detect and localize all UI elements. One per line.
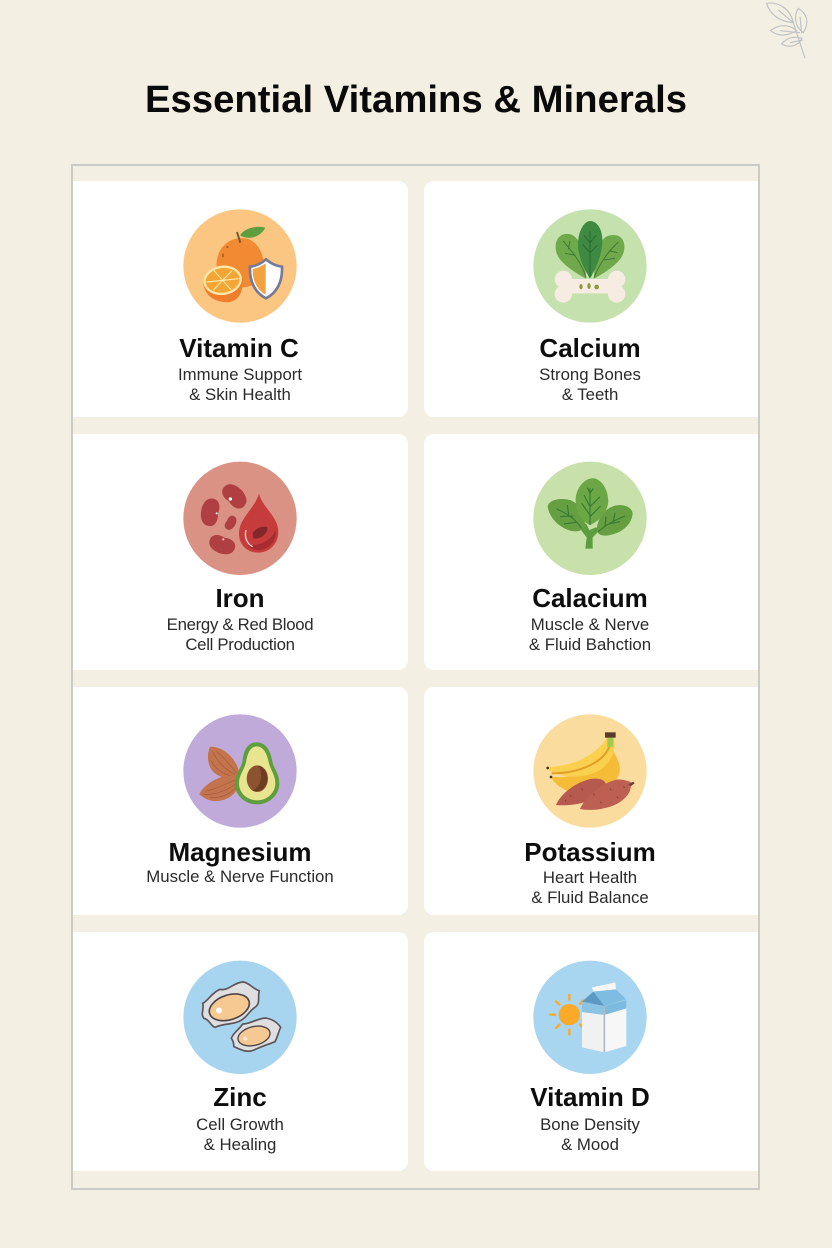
icon: spinach <box>533 462 647 575</box>
description <box>540 1115 640 1154</box>
description <box>539 365 641 404</box>
icon: beans and blood drop <box>183 462 297 575</box>
panel: Vitamin D <box>424 932 759 1171</box>
description: Muscle & Nerve <box>531 615 649 634</box>
description <box>178 365 302 404</box>
panel: Magnesium <box>72 687 408 915</box>
description: & Mood <box>561 1135 619 1154</box>
panel: Potassium <box>424 687 759 915</box>
icon: oysters <box>183 960 297 1074</box>
heading: Vitamin C <box>179 333 299 363</box>
description: & Fluid Bahction <box>529 635 651 654</box>
icon: greens and bone <box>533 209 647 323</box>
heading: Potassium <box>524 837 656 867</box>
description: Muscle & Nerve Function <box>146 867 334 886</box>
icon: bananas and sweet potatoes <box>533 714 647 828</box>
description: & Teeth <box>562 385 618 404</box>
description: Energy & Red Blood <box>167 615 313 634</box>
description <box>529 615 651 654</box>
panel: Zinc <box>72 932 408 1171</box>
description: Cell Production <box>185 635 295 654</box>
heading: Calacium <box>532 583 648 613</box>
icon: sun and milk carton <box>533 960 647 1074</box>
description: & Skin Health <box>189 385 291 404</box>
description: Bone Density <box>540 1115 640 1134</box>
description: Immune Support <box>178 365 302 384</box>
description: Heart Health <box>543 868 637 887</box>
panel: Vitamin C <box>72 181 408 417</box>
description: & Fluid Balance <box>531 888 649 907</box>
description <box>167 615 313 654</box>
heading: Vitamin D <box>530 1082 650 1112</box>
description <box>531 868 649 907</box>
heading: Calcium <box>539 333 641 363</box>
panel: Iron <box>72 434 408 670</box>
icon: orange and shield <box>183 209 297 323</box>
panel: Calcium <box>424 181 759 417</box>
description: & Healing <box>204 1135 276 1154</box>
heading: Iron <box>215 583 265 613</box>
panel: grid frame <box>71 164 760 1190</box>
panel: Calacium <box>424 434 759 670</box>
description: Strong Bones <box>539 365 641 384</box>
description: Cell Growth <box>196 1115 284 1134</box>
title: Essential Vitamins & Minerals <box>145 78 687 121</box>
icon: decorative leaf sprig <box>766 2 808 58</box>
icon: almonds and avocado <box>183 714 297 828</box>
description <box>196 1115 284 1154</box>
heading: Magnesium <box>168 837 312 867</box>
heading: Zinc <box>213 1082 267 1112</box>
